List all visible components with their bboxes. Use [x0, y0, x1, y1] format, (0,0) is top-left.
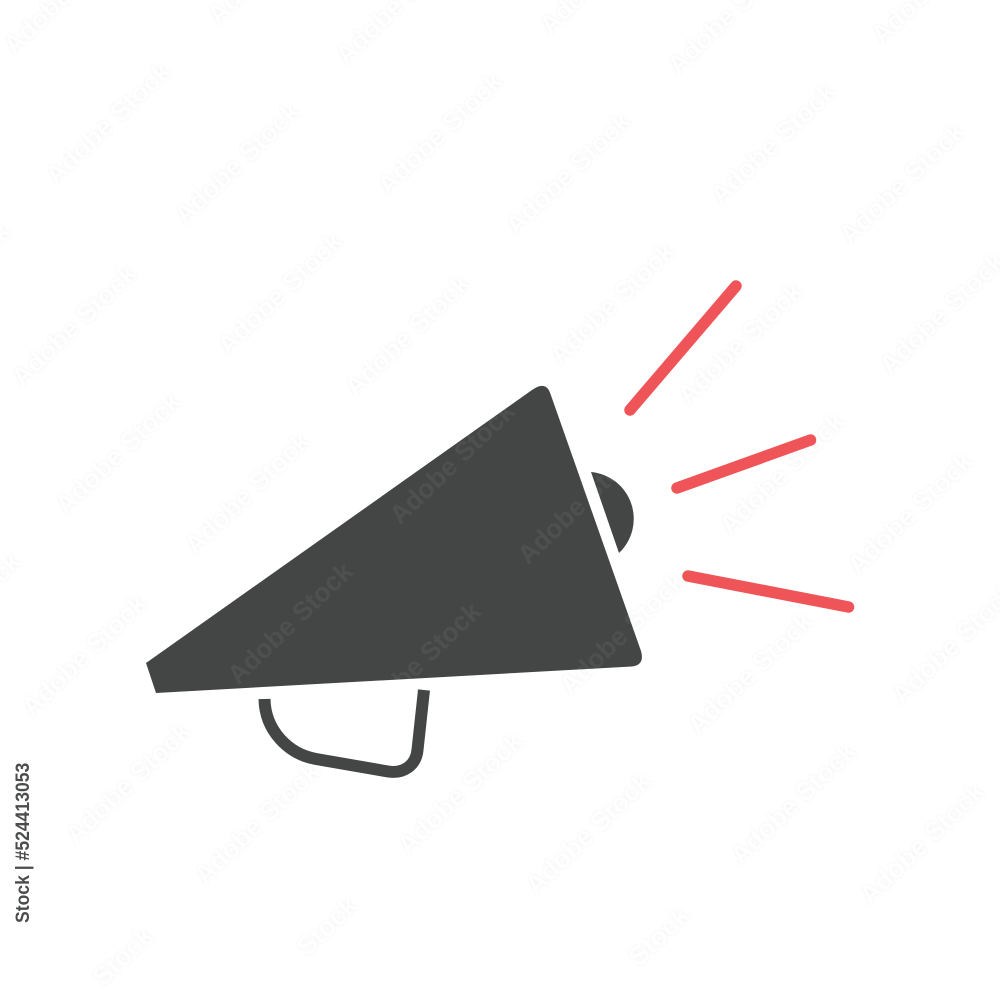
watermark pattern: Adobe Stock on the white background: Adobe Stock — [5, 258, 143, 392]
watermark pattern: Adobe Stock on the white background: Adobe Stock — [841, 446, 979, 580]
watermark pattern: Adobe Stock on the white background: Adobe Stock — [543, 236, 681, 370]
watermark pattern: Adobe Stock on the white background: Adobe Stock — [519, 766, 657, 900]
watermark pattern: Adobe Stock on the white background: Adobe Stock — [681, 606, 819, 740]
megaphone cone — [146, 386, 642, 693]
watermark pattern: Adobe Stock on the white background: Adobe Stock — [49, 386, 187, 520]
watermark pattern: Adobe Stock over the megaphone cone: Adobe Stock — [511, 436, 649, 570]
watermark pattern: Adobe Stock on the white background: Adobe Stock — [168, 96, 306, 230]
watermark pattern: Adobe Stock on the white background: Adobe Stock — [39, 56, 177, 190]
watermark pattern: Adobe Stock on the white background: Adobe Stock — [671, 276, 809, 410]
watermark pattern: Adobe Stock on the white background: Adobe Stock — [724, 736, 862, 870]
watermark pattern: Adobe Stock on the white background: Adobe Stock — [553, 566, 691, 700]
sound ray: middle — [677, 440, 810, 488]
watermark pattern: Adobe Stock over the megaphone cone: Adobe Stock — [349, 596, 487, 730]
watermark pattern: Adobe Stock on the white background: Adobe Stock — [371, 66, 509, 200]
watermark pattern: Adobe Stock on the white background: Adobe Stock — [338, 268, 476, 402]
watermark pattern: Adobe Stock on the white background: Adobe Stock — [15, 588, 153, 722]
watermark pattern: Adobe Stock over the megaphone cone: Adobe Stock — [383, 396, 521, 530]
megaphone handle — [264, 690, 424, 772]
watermark pattern: Adobe Stock on the white background: Adobe Stock — [853, 776, 991, 910]
watermark pattern: Adobe Stock on the white background: Adobe Stock — [713, 406, 851, 540]
watermark pattern: Adobe Stock on the white background: Adobe Stock — [59, 716, 197, 850]
watermark pattern: Adobe Stock on the white background: Adobe Stock — [391, 726, 529, 860]
stock image id text: Stock | #524413053 — [13, 763, 34, 923]
sound ray: top — [630, 286, 736, 410]
watermark pattern: Adobe Stock over the megaphone cone: Adobe Stock — [553, 566, 691, 700]
watermark pattern: Adobe Stock on the white background: Adobe Stock — [188, 756, 326, 890]
watermark pattern: Adobe Stock on the white background: Stock — [291, 890, 363, 962]
watermark pattern: Adobe Stock on the white background: Adobe Stock — [704, 76, 842, 210]
watermark pattern: Adobe Stock on the white background: Adobe Stock — [499, 106, 637, 240]
watermark pattern: Adobe Stock on the white background: Adobe Stock — [833, 116, 971, 250]
sound ray: bottom — [688, 576, 848, 607]
watermark pattern: Adobe Stock on the white background: Adobe Stock — [178, 426, 316, 560]
megaphone back cap — [591, 472, 634, 553]
watermark pattern: Adobe Stock on the white background: Adobe Stock — [211, 226, 349, 360]
watermark pattern: Adobe Stock on the white background: Stock — [623, 900, 695, 972]
watermark pattern: Adobe Stock over the megaphone cone: Adobe Stock — [221, 556, 359, 690]
watermark pattern: Adobe Stock on the white background: Stock — [87, 920, 159, 992]
